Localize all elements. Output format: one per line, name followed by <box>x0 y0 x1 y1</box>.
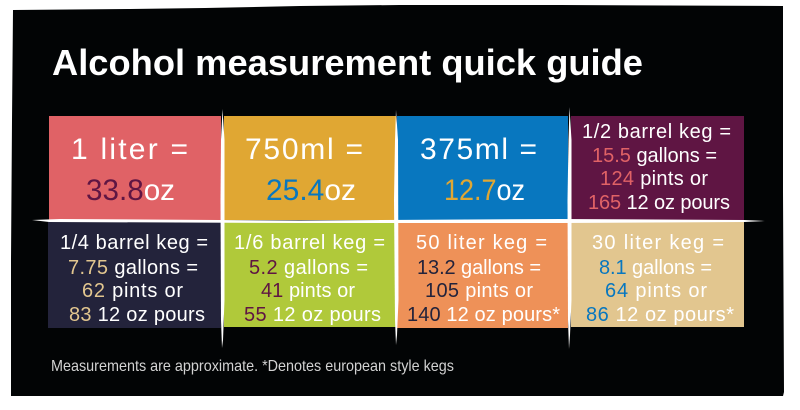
panel: 1/6 barrel keg: 55 12 oz pours <box>244 304 381 326</box>
panel: 50 liter keg: 13.2 gallons = <box>417 257 541 279</box>
footnote: Measurements are approximate. *Denotes european style kegs <box>51 358 454 375</box>
panel: 1/4 barrel keg: 62 pints or <box>82 280 183 302</box>
panel: 30 liter keg: 30 liter keg = <box>592 232 724 254</box>
panel: 30 liter keg: 8.1 gallons = <box>599 257 712 279</box>
panel: 1/6 barrel keg: 41 pints or <box>261 280 355 302</box>
panel: 375ml <box>397 116 568 220</box>
panel: 1/4 barrel keg: 83 12 oz pours <box>69 304 205 326</box>
panel: 750ml <box>224 116 396 220</box>
panel: 1/4 barrel keg: 1/4 barrel keg = <box>60 232 208 254</box>
panel: 30 liter keg: 86 12 oz pours* <box>586 304 734 326</box>
panel: 50 liter keg: 140 12 oz pours* <box>407 304 560 326</box>
panel: 30 liter keg: 64 pints or <box>605 280 707 302</box>
title: Alcohol measurement quick guide <box>52 42 643 83</box>
panel: 50 liter keg: 50 liter keg = <box>416 232 547 254</box>
panel: 750ml: 25.4oz <box>266 174 356 207</box>
panel: 1/2 barrel keg <box>571 116 744 221</box>
panel: 375ml: 12.7oz <box>444 174 525 207</box>
panel: 750ml: 750ml = <box>245 133 363 166</box>
panel: 1/2 barrel keg: 165 12 oz pours <box>588 192 730 214</box>
panel: 1/2 barrel keg: 124 pints or <box>600 168 708 190</box>
panel: 1 liter: 33.8oz <box>86 174 175 207</box>
panel: 1/6 barrel keg: 5.2 gallons = <box>249 257 368 279</box>
panel: 1 liter <box>49 116 221 220</box>
panel: 1 liter: 1 liter = <box>71 133 188 166</box>
panel: 1/2 barrel keg: 15.5 gallons = <box>592 145 717 167</box>
panel: 1/4 barrel keg: 7.75 gallons = <box>68 257 198 279</box>
panel: 1/4 barrel keg <box>48 222 221 328</box>
panel: 50 liter keg: 105 pints or <box>425 280 533 302</box>
panel: 50 liter keg <box>397 222 568 328</box>
panel: 375ml: 375ml = <box>420 133 537 166</box>
panel: 1/6 barrel keg <box>224 222 396 327</box>
panel: 1/2 barrel keg: 1/2 barrel keg = <box>582 121 731 143</box>
panel: 30 liter keg <box>571 221 744 327</box>
panel: 1/6 barrel keg: 1/6 barrel keg = <box>234 232 385 254</box>
